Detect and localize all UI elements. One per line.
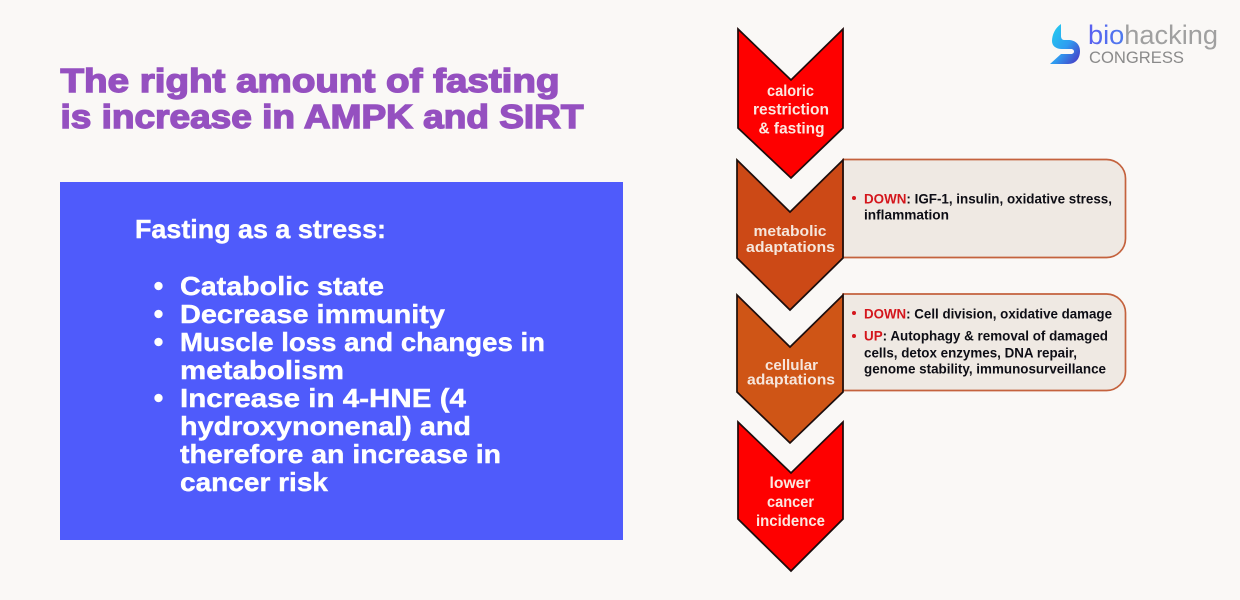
bullet list: Increase in 4-HNE (4 bbox=[180, 383, 467, 413]
panel: metabolic adaptations detail: inflammation bbox=[864, 206, 949, 222]
bullet list: metabolism bbox=[180, 355, 344, 385]
panel: cellular adaptations detail: DOWN: Cell division, oxidative damage bbox=[864, 306, 1112, 322]
bullet list: Catabolic state bbox=[180, 271, 384, 301]
arrow: caloric restriction and fasting bbox=[738, 29, 843, 178]
arrow: caloric restriction and fasting: caloric bbox=[767, 83, 814, 100]
title: The right amount of fasting bbox=[60, 62, 560, 99]
title bbox=[60, 62, 584, 135]
arrow: caloric restriction and fasting: & fasting bbox=[758, 120, 824, 138]
icon: logo mark bbox=[1050, 24, 1080, 64]
panel: cellular adaptations detail: UP: Autophagy & removal of damaged bbox=[864, 328, 1108, 344]
arrow: cellular adaptations: cellular bbox=[765, 357, 818, 374]
panel: cellular adaptations detail: cells, detox enzymes, DNA repair, bbox=[864, 344, 1077, 360]
bullet list: cancer risk bbox=[180, 467, 329, 497]
arrow: lower cancer incidence: lower bbox=[770, 475, 810, 492]
arrow: lower cancer incidence: cancer bbox=[767, 494, 814, 511]
arrow: lower cancer incidence: incidence bbox=[756, 513, 825, 530]
title: is increase in AMPK and SIRT bbox=[60, 98, 584, 135]
logo wordmark: biohacking bbox=[1088, 20, 1218, 50]
logo: biohacking congress bbox=[1050, 20, 1218, 67]
panel heading: Fasting as a stress: bbox=[135, 214, 386, 244]
arrow: metabolic adaptations: adaptations bbox=[746, 239, 835, 256]
bullet list: therefore an increase in bbox=[180, 439, 501, 469]
panel: cellular adaptations detail bbox=[843, 294, 1126, 391]
arrow: metabolic adaptations: metabolic bbox=[754, 223, 826, 240]
arrow: caloric restriction and fasting: restriction bbox=[753, 102, 829, 118]
panel: metabolic adaptations detail: DOWN: IGF-1, insulin, oxidative stress, bbox=[864, 190, 1112, 206]
arrow: lower cancer incidence bbox=[738, 422, 843, 571]
bullet list: Decrease immunity bbox=[180, 299, 446, 329]
flow diagram bbox=[737, 29, 1126, 571]
bullet list: hydroxynonenal) and bbox=[180, 411, 471, 441]
logo subtitle: CONGRESS bbox=[1089, 48, 1184, 67]
panel: metabolic adaptations detail bbox=[843, 159, 1126, 258]
panel: cellular adaptations detail: genome stability, immunosurveillance bbox=[864, 360, 1106, 376]
bullet list bbox=[154, 271, 545, 497]
panel: fasting as a stress bbox=[60, 182, 623, 540]
arrow: cellular adaptations: adaptations bbox=[747, 372, 835, 388]
arrow: metabolic adaptations bbox=[737, 160, 843, 310]
arrow: cellular adaptations bbox=[737, 295, 843, 443]
bullet list: Muscle loss and changes in bbox=[180, 327, 545, 357]
